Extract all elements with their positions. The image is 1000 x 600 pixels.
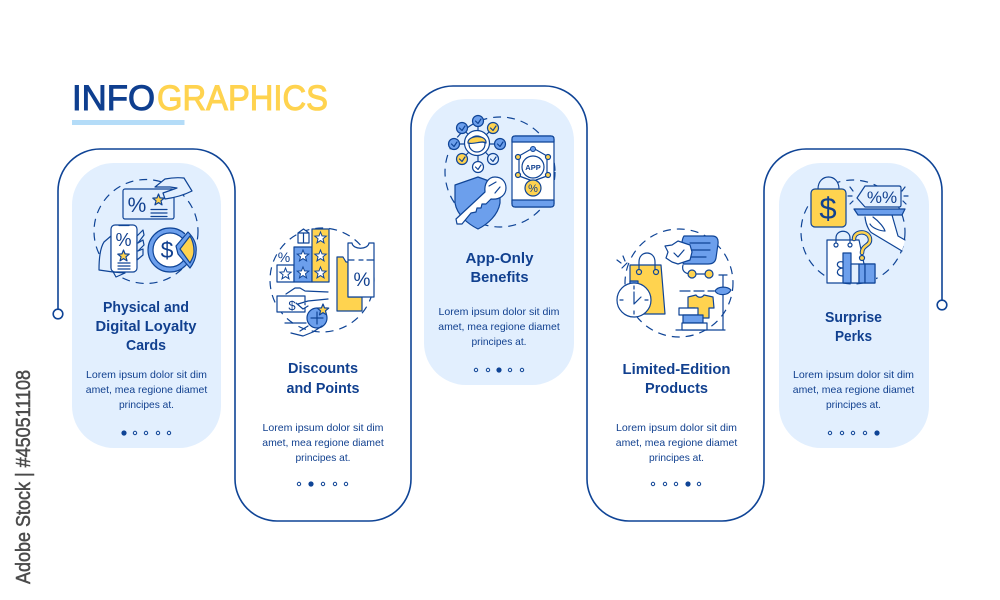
heading — [466, 250, 534, 286]
connecting outline — [53, 86, 947, 521]
icon: app-only benefits: APP — [525, 163, 541, 172]
panel: discounts and points — [262, 228, 384, 486]
body text — [86, 369, 207, 411]
body text — [793, 369, 914, 411]
body text — [438, 306, 560, 348]
icon: surprise perks: %% — [867, 188, 897, 207]
body text: principes at. — [296, 452, 350, 464]
icon: discounts and points: % — [278, 249, 290, 265]
heading: Cards — [126, 337, 166, 354]
body text — [262, 422, 384, 464]
icon: surprise perks — [801, 177, 908, 284]
pagination dots — [474, 368, 524, 372]
body text: amet, mea regione diamet — [616, 437, 737, 449]
heading: Limited-Edition — [622, 361, 730, 378]
pagination dots — [651, 482, 701, 486]
body text: amet, mea regione diamet — [793, 384, 914, 396]
body text: principes at. — [649, 452, 704, 464]
icon: discounts and points — [270, 228, 374, 336]
panel: physical and digital loyalty cards — [86, 178, 207, 435]
body text: Lorem ipsum dolor sit dim — [616, 422, 737, 434]
pagination dots — [122, 431, 171, 435]
icon: loyalty cards: % — [115, 230, 132, 250]
body text: principes at. — [826, 399, 881, 411]
heading: Discounts — [288, 360, 358, 377]
heading — [825, 309, 882, 345]
body text: Lorem ipsum dolor sit dim — [86, 369, 207, 381]
body text: amet, mea regione diamet — [262, 437, 384, 449]
body text: amet, mea regione diamet — [86, 384, 207, 396]
icon: surprise perks: $ — [819, 191, 837, 226]
heading: Surprise — [825, 309, 882, 326]
light panels — [72, 99, 929, 448]
heading: Perks — [835, 328, 872, 345]
icon: discounts and points: % — [354, 270, 371, 291]
body text: Lorem ipsum dolor sit dim — [438, 306, 560, 318]
panel: app-only benefits — [438, 116, 560, 372]
icon: app-only benefits: % — [528, 183, 538, 195]
heading — [286, 360, 360, 397]
title: INFO — [72, 79, 155, 118]
icon: limited-edition products — [617, 229, 733, 337]
heading: Products — [645, 380, 708, 397]
body text: Lorem ipsum dolor sit dim — [262, 422, 384, 434]
body text: amet, mea regione diamet — [438, 321, 560, 333]
panel: surprise perks — [793, 177, 914, 435]
icon: loyalty cards: % — [128, 194, 146, 217]
heading — [96, 299, 197, 354]
heading: Physical and — [103, 299, 189, 316]
title — [72, 79, 328, 125]
body text — [616, 422, 737, 464]
pagination dots — [828, 431, 879, 435]
side credit: Adobe Stock | #450511108 — [13, 370, 35, 584]
heading — [622, 361, 730, 397]
icon: loyalty cards: $ — [161, 237, 174, 263]
heading: Benefits — [470, 269, 528, 286]
icon: app-only benefits — [445, 116, 555, 229]
title: GRAPHICS — [157, 79, 328, 118]
body text: principes at. — [119, 399, 174, 411]
panel: limited-edition products — [616, 229, 737, 486]
heading: and Points — [286, 380, 360, 397]
body text: Lorem ipsum dolor sit dim — [793, 369, 914, 381]
icon: loyalty cards — [94, 178, 200, 284]
pagination dots — [297, 482, 348, 486]
heading: Digital Loyalty — [96, 318, 197, 335]
heading: App-Only — [466, 250, 534, 267]
body text: principes at. — [472, 336, 526, 348]
icon: discounts and points: $ — [288, 298, 296, 313]
